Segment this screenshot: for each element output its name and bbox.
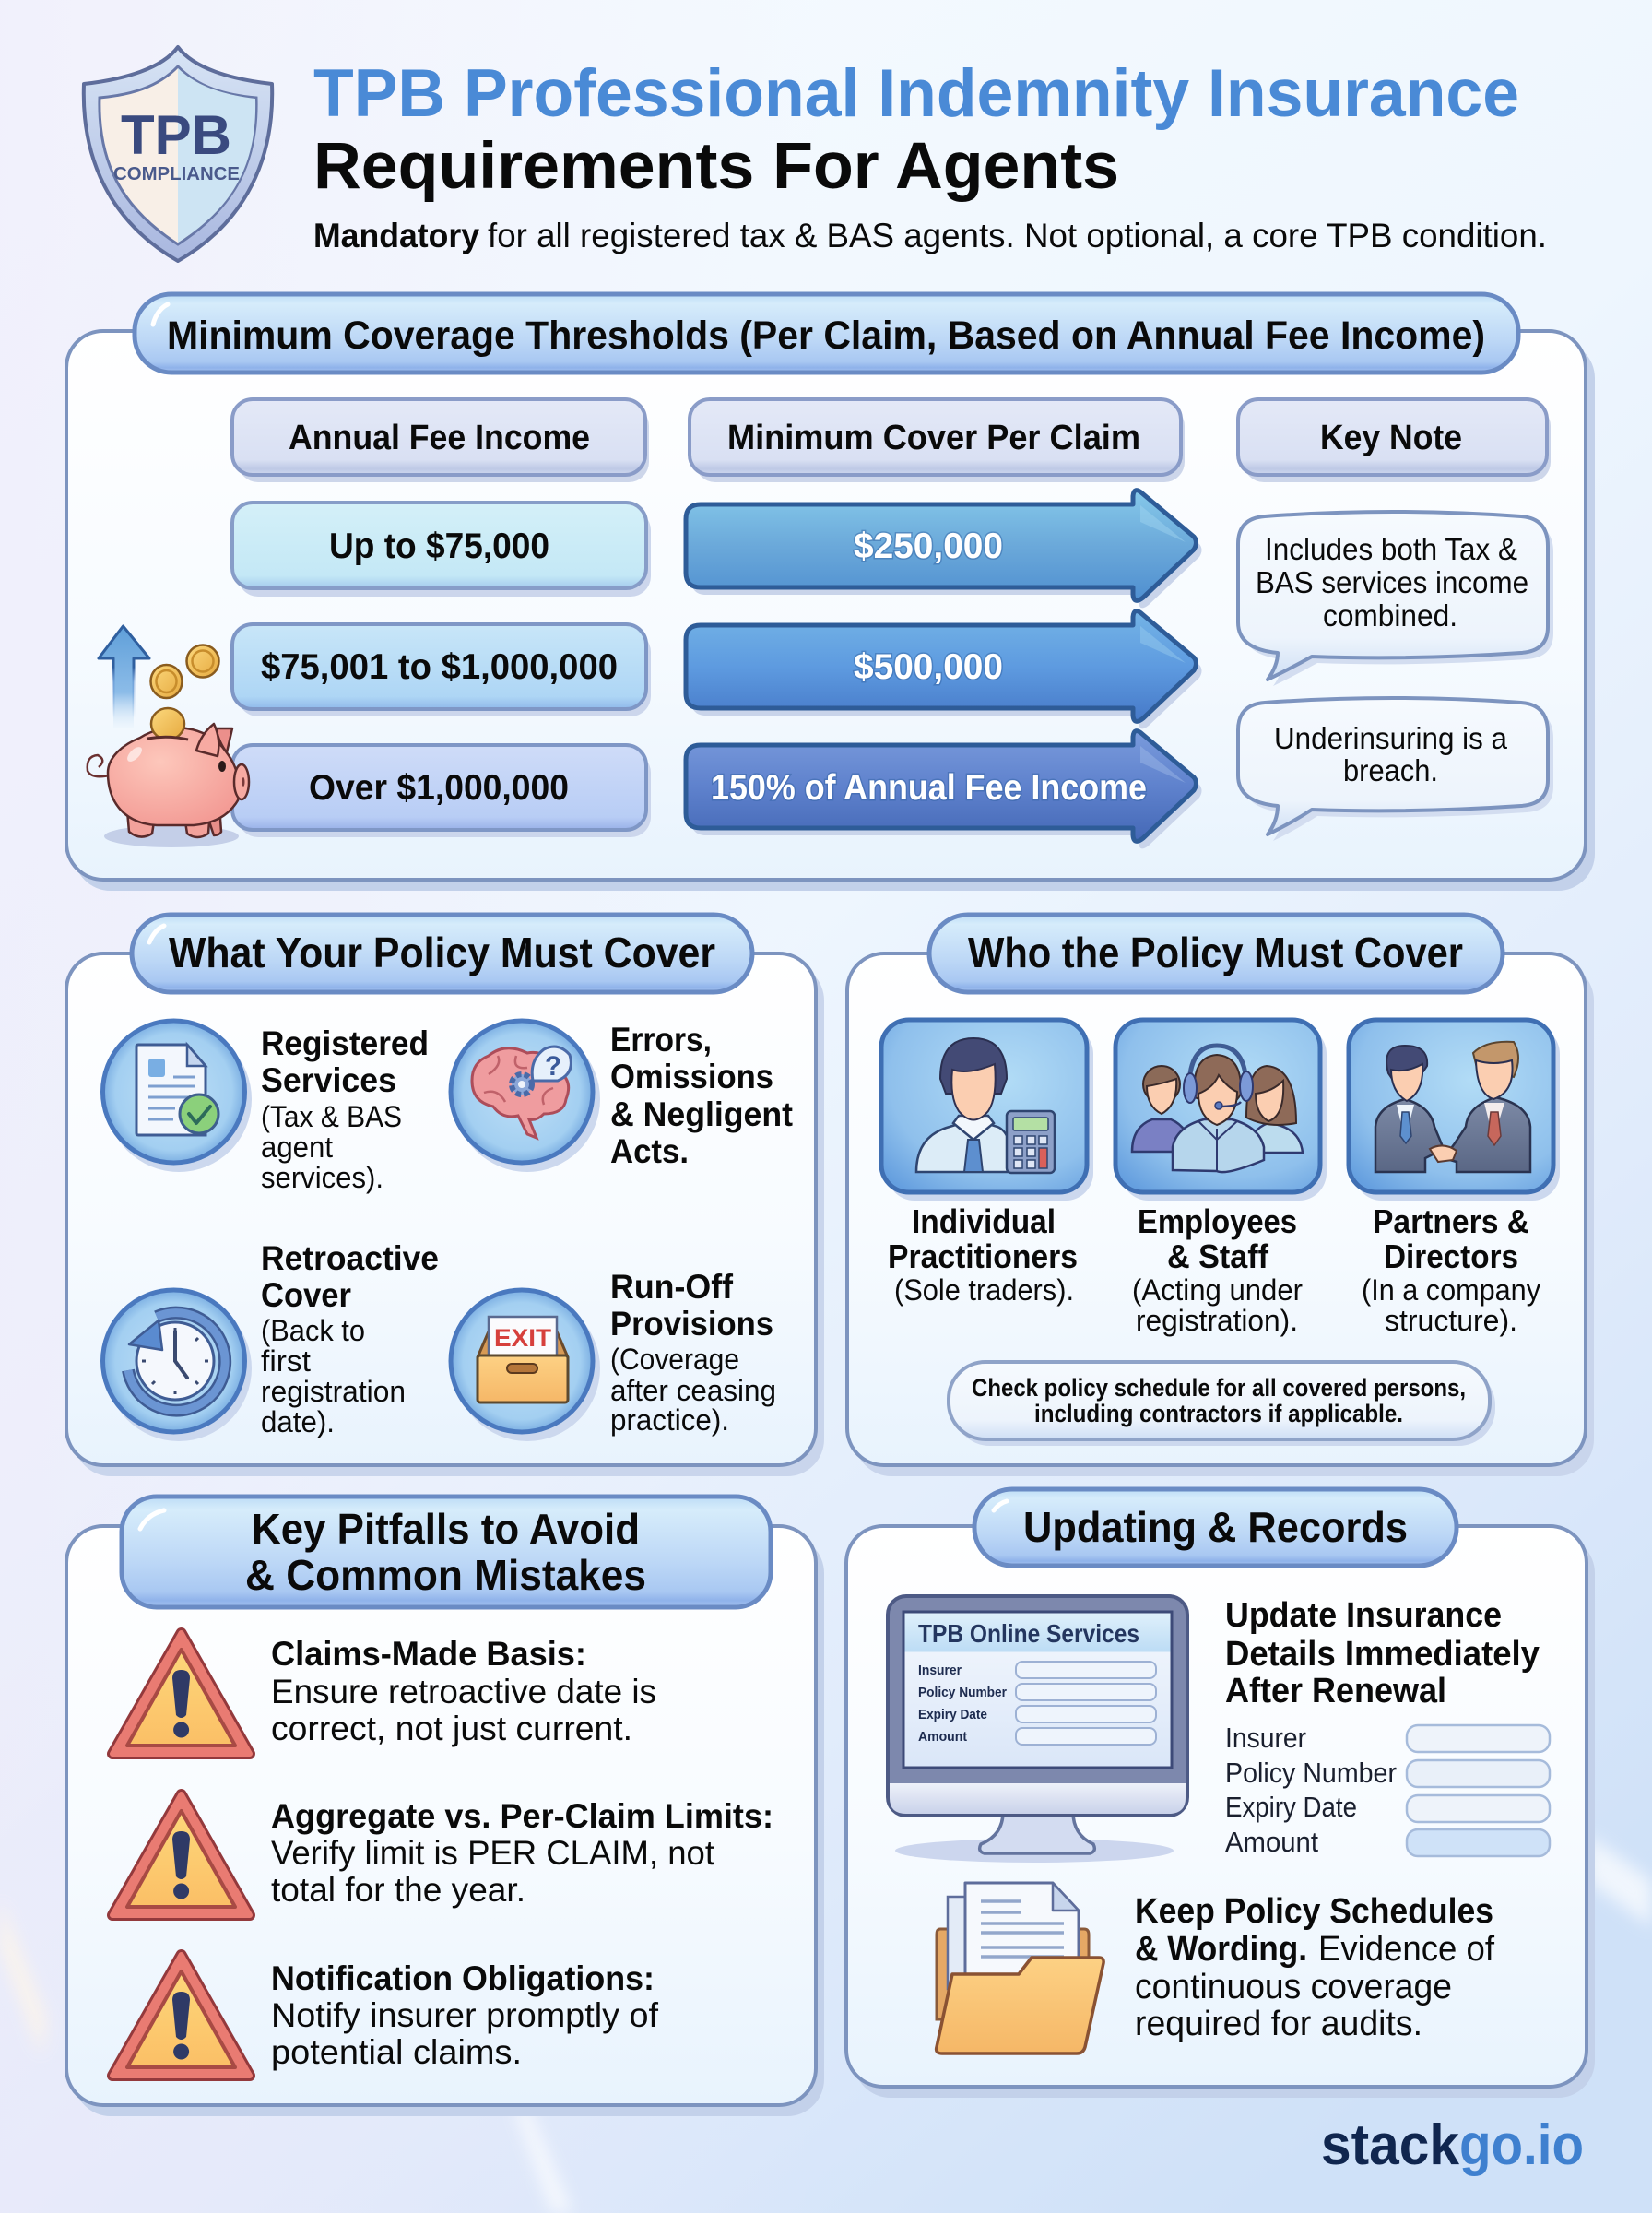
logo: stackgo.io <box>1321 2113 1584 2177</box>
item: registered services <box>103 1021 429 1194</box>
heading pill: who the policy must cover <box>929 915 1503 992</box>
income row: 75001 to 1000000: $75,001 to $1,000,000 <box>261 647 618 687</box>
text: update insurance details: After Renewal <box>1225 1672 1446 1710</box>
column header: annual fee income: Annual Fee Income <box>289 419 590 457</box>
callout: includes both tax and bas: Includes both Tax & <box>1265 532 1517 566</box>
icon: document with check <box>136 1045 218 1135</box>
income row: over 1000000 <box>232 745 651 837</box>
subtitle: Mandatory <box>313 217 479 254</box>
icon: warning triangle <box>112 1955 250 2076</box>
shield badge: TPB compliance <box>84 47 272 261</box>
item: aggregate vs per-claim limits: Verify limit is PER CLAIM, not <box>271 1834 715 1872</box>
item: run-off provisions: after ceasing <box>610 1374 776 1407</box>
item: notification obligations <box>112 1955 659 2076</box>
icon: warning triangle <box>112 1633 250 1754</box>
heading pill: minimum coverage <box>135 294 1518 373</box>
column header: minimum cover per claim <box>690 399 1185 482</box>
item: errors omissions negligent acts: Acts. <box>610 1132 689 1170</box>
icon: monitor with TPB online services form <box>888 1596 1187 1863</box>
item: claims-made basis <box>112 1633 656 1754</box>
panel: who the policy must cover <box>847 915 1594 1476</box>
heading pill: updating and records <box>974 1489 1457 1566</box>
logo: stackgo.io: go.io <box>1459 2113 1584 2177</box>
callout: includes both tax and bas <box>1238 512 1553 686</box>
subtitle: for all registered tax & BAS agents. Not optional, a core TPB condition. <box>488 217 1547 254</box>
logo: stackgo.io: stack <box>1321 2113 1459 2177</box>
icon: monitor with TPB online services form: Amount <box>918 1729 967 1745</box>
heading pill: what your policy must cover <box>132 915 752 992</box>
column header: annual fee income <box>232 399 649 482</box>
text: update insurance details: Update Insurance <box>1225 1596 1502 1635</box>
item: partners and directors <box>1349 1020 1560 1337</box>
item: individual practitioners: (Sole traders). <box>894 1273 1074 1307</box>
icon: monitor with TPB online services form: Insurer <box>918 1663 962 1678</box>
icon: piggy bank with coins <box>88 645 249 847</box>
note pill: check policy schedule: including contractors if applicable. <box>1034 1400 1403 1427</box>
arrow: 150 percent of annual fee income: 150% of Annual Fee Income <box>711 768 1147 808</box>
item: partners and directors: (In a company <box>1362 1273 1540 1307</box>
text: keep policy schedules: continuous coverage <box>1135 1968 1452 2006</box>
callout: underinsuring is a breach: breach. <box>1343 753 1438 787</box>
item: partners and directors: structure). <box>1385 1304 1517 1337</box>
item: retroactive cover: (Back to <box>261 1314 365 1347</box>
item: retroactive cover: registration <box>261 1375 406 1408</box>
item: notification obligations: Notify insurer promptly of <box>271 1996 659 2034</box>
item: notification obligations: Notification Obligations: <box>271 1959 655 1997</box>
item: individual practitioners: Practitioners <box>888 1237 1078 1275</box>
item: individual practitioners <box>881 1020 1093 1307</box>
icon: monitor with TPB online services form: TPB Online Services <box>918 1619 1139 1648</box>
icon: folder with documents <box>937 1883 1103 2053</box>
item: aggregate vs per-claim limits: Aggregate vs. Per-Claim Limits: <box>271 1797 773 1835</box>
item: run-off provisions: practice). <box>610 1403 729 1437</box>
item: retroactive cover: Retroactive <box>261 1239 439 1277</box>
item: employees and staff: Employees <box>1138 1202 1297 1240</box>
form: insurance fields <box>1225 1722 1550 1858</box>
icon: exit box: EXIT <box>494 1324 552 1352</box>
text: keep policy schedules: required for audits. <box>1135 2005 1422 2043</box>
item: run-off provisions: (Coverage <box>610 1343 739 1376</box>
item: employees and staff: & Staff <box>1167 1237 1269 1275</box>
heading pill: minimum coverage: Minimum Coverage Thresholds (Per Claim, Based on Annual Fee Income) <box>167 314 1485 358</box>
form: insurance fields: Policy Number <box>1225 1757 1397 1789</box>
item: employees and staff <box>1115 1020 1327 1337</box>
icon: brain with question mark <box>472 1047 571 1138</box>
item: employees and staff: (Acting under <box>1132 1273 1303 1307</box>
item: retroactive cover <box>103 1239 439 1441</box>
item: retroactive cover: first <box>261 1344 311 1378</box>
callout: underinsuring is a breach: Underinsuring is a <box>1274 721 1508 755</box>
text: update insurance details: Details Immediately <box>1225 1635 1540 1674</box>
item: errors omissions negligent acts <box>451 1021 793 1172</box>
item: run-off provisions <box>451 1268 776 1441</box>
form: insurance fields: Expiry Date <box>1225 1791 1357 1823</box>
item: registered services: services). <box>261 1161 384 1194</box>
text: keep policy schedules <box>1135 1892 1494 2043</box>
callout: includes both tax and bas: combined. <box>1323 598 1457 633</box>
form: insurance fields: Amount <box>1225 1826 1318 1858</box>
income row: over 1000000: Over $1,000,000 <box>309 768 569 808</box>
item: errors omissions negligent acts: & Negligent <box>610 1095 793 1133</box>
item: retroactive cover: Cover <box>261 1276 351 1314</box>
item: claims-made basis: Ensure retroactive date is <box>271 1673 656 1710</box>
icon: exit box <box>478 1317 568 1402</box>
item: partners and directors: Partners & <box>1373 1202 1529 1240</box>
panel: key pitfalls <box>66 1497 824 2116</box>
item: registered services: (Tax & BAS <box>261 1100 402 1133</box>
arrow: 500000 <box>686 611 1202 728</box>
income row: up to 75000: Up to $75,000 <box>329 527 549 566</box>
shield badge: TPB compliance: COMPLIANCE <box>113 164 240 184</box>
title <box>313 56 1519 203</box>
column header: key note: Key Note <box>1320 419 1462 457</box>
icon: practitioner with calculator <box>916 1038 1055 1173</box>
item: errors omissions negligent acts: Omissions <box>610 1058 773 1095</box>
item: aggregate vs per-claim limits <box>112 1794 773 1915</box>
item: aggregate vs per-claim limits: total for the year. <box>271 1871 525 1909</box>
panel: minimum coverage thresholds <box>66 294 1595 891</box>
item: partners and directors: Directors <box>1384 1237 1518 1275</box>
column header: key note <box>1238 399 1551 482</box>
icon: two partners shaking hands <box>1375 1042 1530 1172</box>
icon: warning triangle <box>112 1794 250 1915</box>
icon: monitor with TPB online services form: Expiry Date <box>918 1707 987 1722</box>
item: errors omissions negligent acts: Errors, <box>610 1021 712 1059</box>
panel: updating and records <box>846 1489 1595 2098</box>
item: claims-made basis: Claims-Made Basis: <box>271 1635 586 1673</box>
heading pill: updating and records: Updating & Records <box>1023 1503 1408 1551</box>
text: keep policy schedules: Evidence of <box>1318 1930 1494 1969</box>
heading pill: key pitfalls <box>122 1497 771 1607</box>
item: registered services: Registered <box>261 1024 429 1062</box>
item: notification obligations: potential claims. <box>271 2033 522 2071</box>
text: keep policy schedules: & Wording. <box>1135 1930 1307 1969</box>
heading pill: what your policy must cover: What Your Policy Must Cover <box>169 929 715 976</box>
item: retroactive cover: date). <box>261 1405 335 1438</box>
title: Requirements For Agents <box>313 130 1119 203</box>
income row: up to 75000 <box>232 503 651 597</box>
icon: brain with question mark: ? <box>545 1051 561 1082</box>
icon: monitor with TPB online services form: Policy Number <box>918 1685 1007 1700</box>
arrow: 150 percent of annual fee income <box>686 731 1202 848</box>
icon: team with headset <box>1132 1046 1303 1172</box>
income row: 75001 to 1000000 <box>232 624 651 716</box>
item: employees and staff: registration). <box>1136 1304 1298 1337</box>
shield badge: TPB compliance: TPB <box>121 104 231 166</box>
panel: what your policy must cover <box>66 915 824 1476</box>
icon: growth arrow <box>99 626 149 728</box>
title: TPB Professional Indemnity Insurance <box>313 56 1519 131</box>
item: registered services: Services <box>261 1061 396 1099</box>
text: update insurance details <box>1225 1596 1540 1710</box>
heading pill: who the policy must cover: Who the Policy Must Cover <box>968 929 1463 976</box>
icon: clock with back arrow <box>128 1313 225 1411</box>
form: insurance fields: Insurer <box>1225 1722 1306 1754</box>
item: run-off provisions: Run-Off <box>610 1268 734 1306</box>
arrow: 500000: $500,000 <box>854 647 1003 687</box>
callout: includes both tax and bas: BAS services income <box>1256 565 1528 599</box>
item: registered services: agent <box>261 1130 333 1164</box>
item: claims-made basis: correct, not just current. <box>271 1710 632 1747</box>
note pill: check policy schedule <box>949 1362 1495 1446</box>
text: keep policy schedules: Keep Policy Schedules <box>1135 1892 1493 1931</box>
heading pill: key pitfalls: Key Pitfalls to Avoid <box>252 1505 640 1553</box>
note pill: check policy schedule: Check policy schedule for all covered persons, <box>972 1374 1466 1402</box>
callout: underinsuring is a breach <box>1238 698 1553 841</box>
column header: minimum cover per claim: Minimum Cover Per Claim <box>727 419 1140 457</box>
item: run-off provisions: Provisions <box>610 1305 773 1343</box>
arrow: 250000: $250,000 <box>854 527 1003 566</box>
heading pill: key pitfalls: & Common Mistakes <box>245 1551 646 1599</box>
arrow: 250000 <box>686 491 1202 608</box>
item: individual practitioners: Individual <box>912 1202 1056 1240</box>
